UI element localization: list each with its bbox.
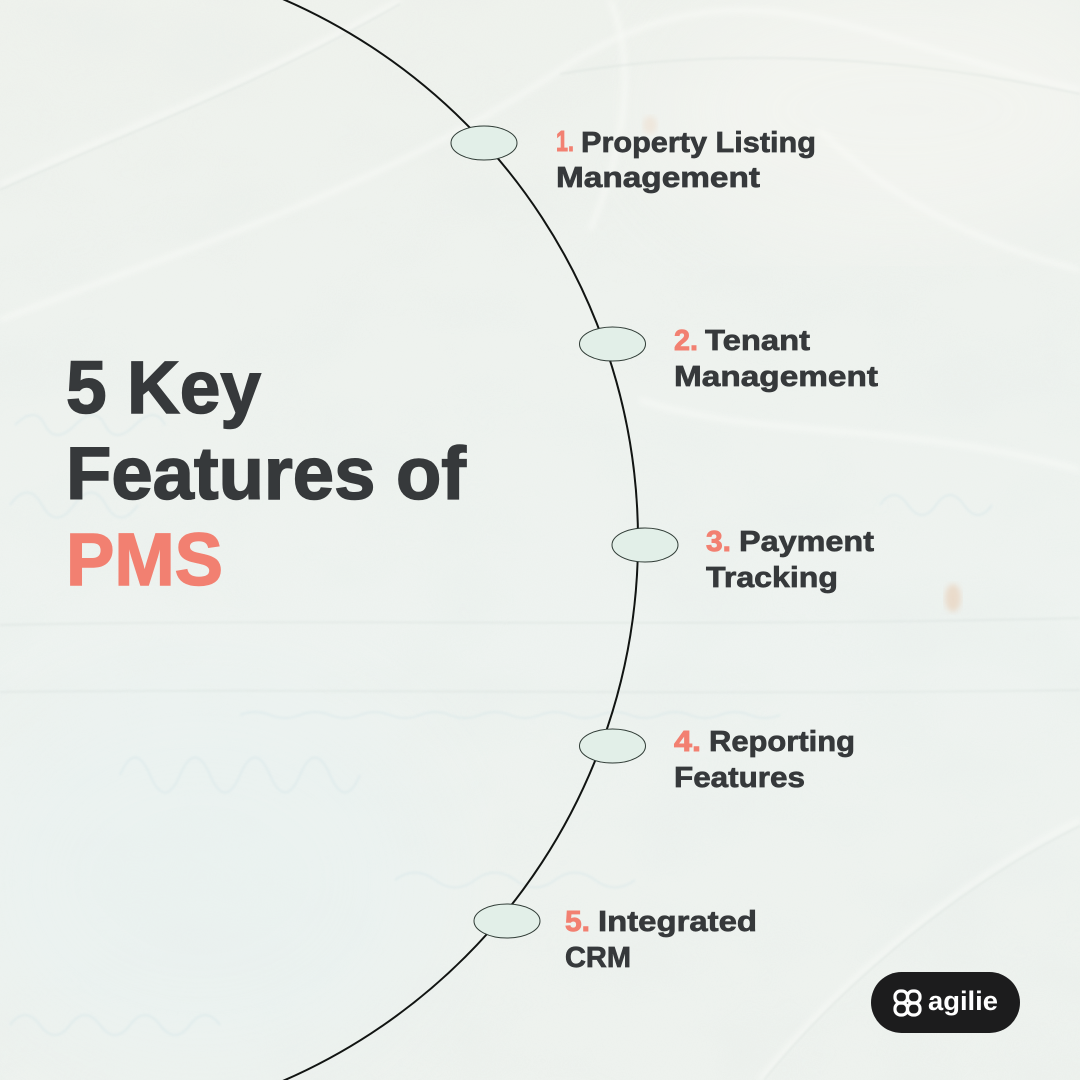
label 4: 4. (674, 726, 701, 758)
feature 4: reporting features (580, 726, 855, 794)
timeline arc (0, 0, 638, 1080)
label 3 (706, 526, 874, 594)
label 3: Payment (739, 526, 874, 558)
feature 1: property listing management (451, 126, 816, 194)
marker 5 (474, 904, 540, 938)
title: PMS (66, 518, 223, 601)
label 5 (565, 906, 757, 974)
feature 3: payment tracking (612, 526, 874, 594)
marker 2 (580, 327, 646, 361)
label 2: 2. (674, 325, 698, 357)
label 4 (674, 726, 855, 794)
label 1: Management (556, 162, 760, 194)
marker 4 (580, 729, 646, 763)
label 2: Tenant (705, 325, 810, 357)
icon: agilie clover (895, 991, 920, 1015)
marker 3 (612, 528, 678, 562)
title (66, 346, 466, 601)
marker 1 (451, 126, 517, 160)
title: Features of (66, 432, 466, 515)
label 4: Reporting (709, 726, 855, 758)
feature 2: tenant management (580, 325, 878, 393)
label 1 (556, 126, 816, 194)
label 2: Management (674, 361, 878, 393)
logo badge (871, 972, 1020, 1033)
logo wordmark: agilie (928, 986, 998, 1016)
label 4: Features (674, 762, 805, 794)
label 5: Integrated (598, 906, 757, 938)
title: 5 Key (66, 346, 261, 429)
label 2 (674, 325, 878, 393)
label 3: Tracking (706, 562, 838, 594)
label 1: 1. (556, 126, 574, 158)
label 3: 3. (706, 526, 731, 558)
label 5: CRM (565, 942, 631, 974)
feature 5: integrated crm (474, 904, 757, 974)
label 1: Property Listing (581, 127, 816, 159)
label 5: 5. (565, 906, 590, 938)
